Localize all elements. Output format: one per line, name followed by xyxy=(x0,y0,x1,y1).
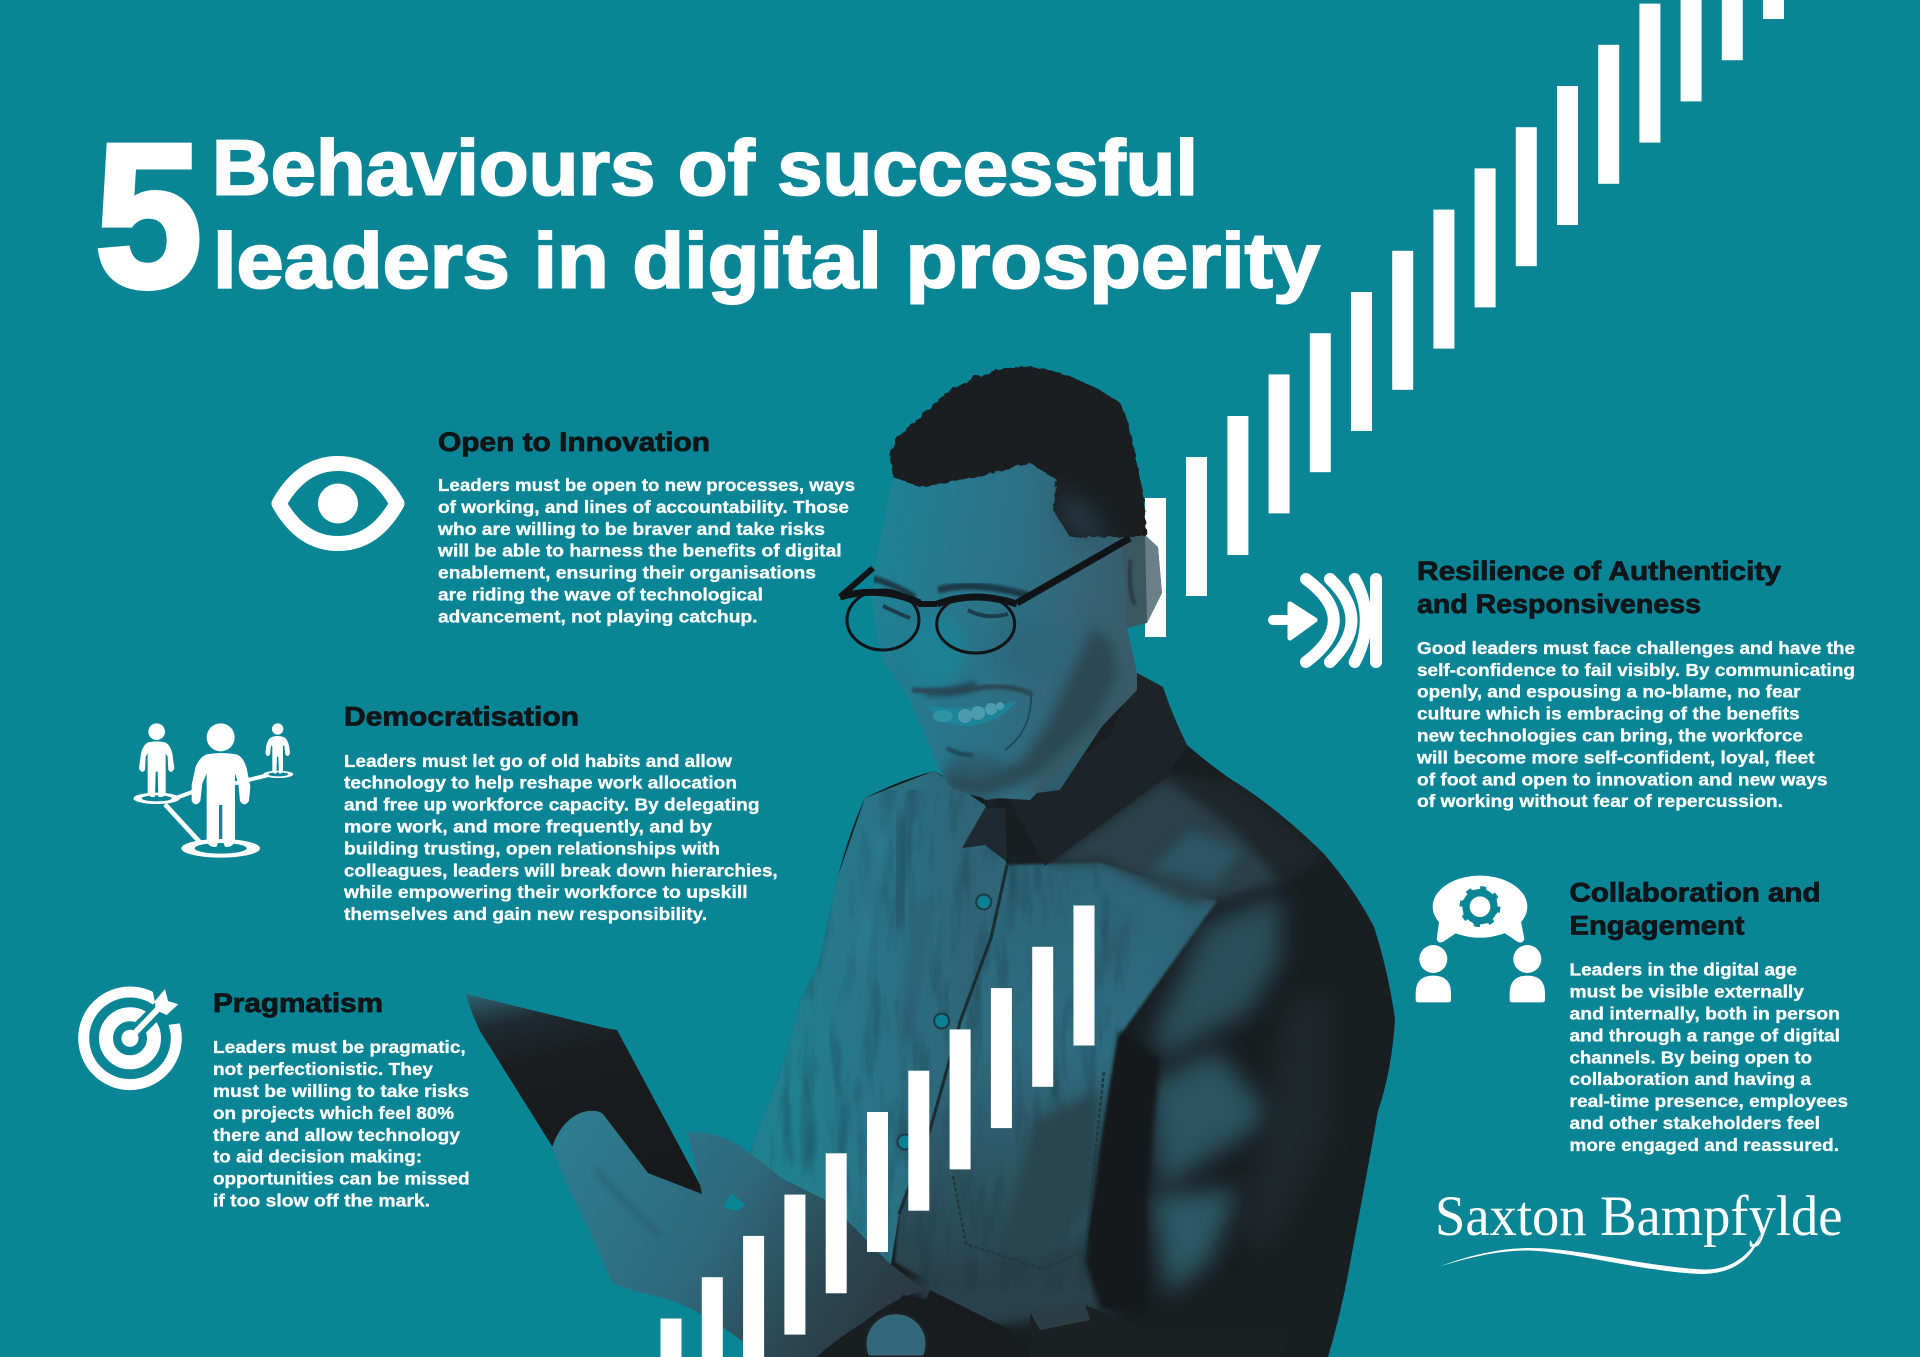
body text: and other stakeholders feel xyxy=(1570,1113,1820,1133)
icon: target with arrow xyxy=(84,988,190,1085)
body text: there and allow technology xyxy=(213,1125,460,1145)
body text: themselves and gain new responsibility. xyxy=(344,904,707,924)
lower arm and cuff xyxy=(926,1290,1008,1335)
shirt placket and pocket xyxy=(899,865,1007,1214)
hand xyxy=(552,1111,924,1357)
section: Resilience of Authenticity and Responsiveness xyxy=(1416,556,1855,811)
body text: culture which is embracing of the benefits xyxy=(1417,704,1800,724)
body text: new technologies can bring, the workforce xyxy=(1417,726,1803,746)
dark band beside pocket xyxy=(1085,1030,1160,1314)
eyebrows and eyes xyxy=(870,578,915,597)
body text: while empowering their workforce to upskill xyxy=(343,882,748,902)
tablet xyxy=(466,994,705,1194)
body text: who are willing to be braver and take risks xyxy=(437,519,825,539)
body text: building trusting, open relationships with xyxy=(344,838,720,858)
body text: more engaged and reassured. xyxy=(1570,1135,1839,1155)
title line 1: Behaviours of successful xyxy=(212,124,1198,212)
body text: real-time presence, employees xyxy=(1570,1091,1848,1111)
icon: eye xyxy=(279,464,397,544)
body text: enablement, ensuring their organisations xyxy=(438,563,816,583)
body text: opportunities can be missed xyxy=(213,1169,470,1189)
logo: Saxton Bampfylde: Saxton Bampfylde xyxy=(1435,1185,1842,1248)
body text: must be willing to take risks xyxy=(213,1081,469,1101)
icon: collaboration speech bubble with gear and two people xyxy=(1416,876,1545,1002)
numeral 5: 5 xyxy=(95,102,202,330)
upper rising white bars xyxy=(1145,0,1784,637)
beard xyxy=(943,627,1117,797)
body text: if too slow off the mark. xyxy=(213,1190,430,1210)
photo: smiling man with glasses using a tablet (duotone) xyxy=(466,366,1410,1357)
body text: are riding the wave of technological xyxy=(438,584,763,604)
icon: arrow into chevrons xyxy=(1273,579,1376,662)
title line 2: leaders in digital prosperity xyxy=(213,216,1320,304)
glasses xyxy=(840,538,1130,653)
ear xyxy=(1122,535,1147,628)
body text: self-confidence to fail visibly. By communicating xyxy=(1417,660,1855,680)
section: Collaboration and Engagement: Engagement xyxy=(1570,910,1745,940)
body text: on projects which feel 80% xyxy=(213,1103,454,1123)
body text: colleagues, leaders will break down hierarchies, xyxy=(344,860,778,880)
body text: not perfectionistic. They xyxy=(213,1059,433,1079)
body text xyxy=(213,1037,470,1210)
body text: of working without fear of repercussion. xyxy=(1417,791,1783,811)
left shirt front xyxy=(751,771,1007,1264)
heading: Collaboration and xyxy=(1570,878,1820,908)
heading: Open to Innovation xyxy=(438,427,710,457)
body text: more work, and more frequently, and by xyxy=(344,816,712,836)
section: Pragmatism xyxy=(213,988,470,1210)
hair xyxy=(890,366,1147,537)
section: Collaboration and Engagement xyxy=(1570,878,1848,1155)
body text: of foot and open to innovation and new ways xyxy=(1417,769,1828,789)
body text: collaboration and having a xyxy=(1570,1069,1811,1089)
body text: and free up workforce capacity. By delegating xyxy=(344,795,760,815)
watch xyxy=(865,1295,930,1357)
shirt and body xyxy=(740,660,1410,1357)
shirt wrinkle texture xyxy=(770,790,1130,1290)
body text: of working, and lines of accountability. Those xyxy=(438,497,849,517)
body text: Leaders must be open to new processes, ways xyxy=(438,475,855,495)
body text xyxy=(437,475,855,626)
logo: Saxton Bampfylde xyxy=(1435,1185,1842,1274)
centre shirt front xyxy=(895,862,1217,1300)
body text: to aid decision making: xyxy=(213,1147,422,1167)
body text: advancement, not playing catchup. xyxy=(438,606,758,626)
body text: and internally, both in person xyxy=(1570,1004,1840,1024)
body text: Leaders must let go of old habits and allow xyxy=(344,751,732,771)
yoke xyxy=(1045,778,1283,905)
body text: must be visible externally xyxy=(1570,982,1804,1002)
heading: Resilience of Authenticity xyxy=(1417,556,1781,586)
smile xyxy=(927,701,1017,726)
nose shadow and moustache xyxy=(925,680,978,697)
body text: openly, and espousing a no-blame, no fear xyxy=(1417,682,1801,702)
body text: will become more self-confident, loyal, fleet xyxy=(1416,747,1815,767)
sleeve highlights xyxy=(1155,895,1280,1060)
body text: and through a range of digital xyxy=(1570,1025,1840,1045)
section: Open to Innovation xyxy=(437,427,855,626)
body text: Leaders must be pragmatic, xyxy=(213,1037,466,1057)
body text xyxy=(343,751,778,924)
body text xyxy=(1570,960,1848,1155)
section: Resilience of Authenticity and Responsiveness: and Responsiveness xyxy=(1417,589,1701,619)
body text: technology to help reshape work allocation xyxy=(344,773,737,793)
body text: will be able to harness the benefits of digital xyxy=(437,541,842,561)
face xyxy=(872,463,1162,800)
icon: connected people xyxy=(133,723,293,858)
body text xyxy=(1416,638,1855,811)
title xyxy=(95,102,1320,330)
heading: Pragmatism xyxy=(213,988,383,1018)
heading: Democratisation xyxy=(344,702,579,732)
body text: channels. By being open to xyxy=(1570,1047,1812,1067)
collar xyxy=(1036,673,1187,866)
body text: Good leaders must face challenges and have the xyxy=(1417,638,1855,658)
section: Democratisation xyxy=(343,702,778,924)
lower rising white bars xyxy=(660,906,1094,1357)
body text: Leaders in the digital age xyxy=(1570,960,1797,980)
neck xyxy=(953,673,1165,850)
